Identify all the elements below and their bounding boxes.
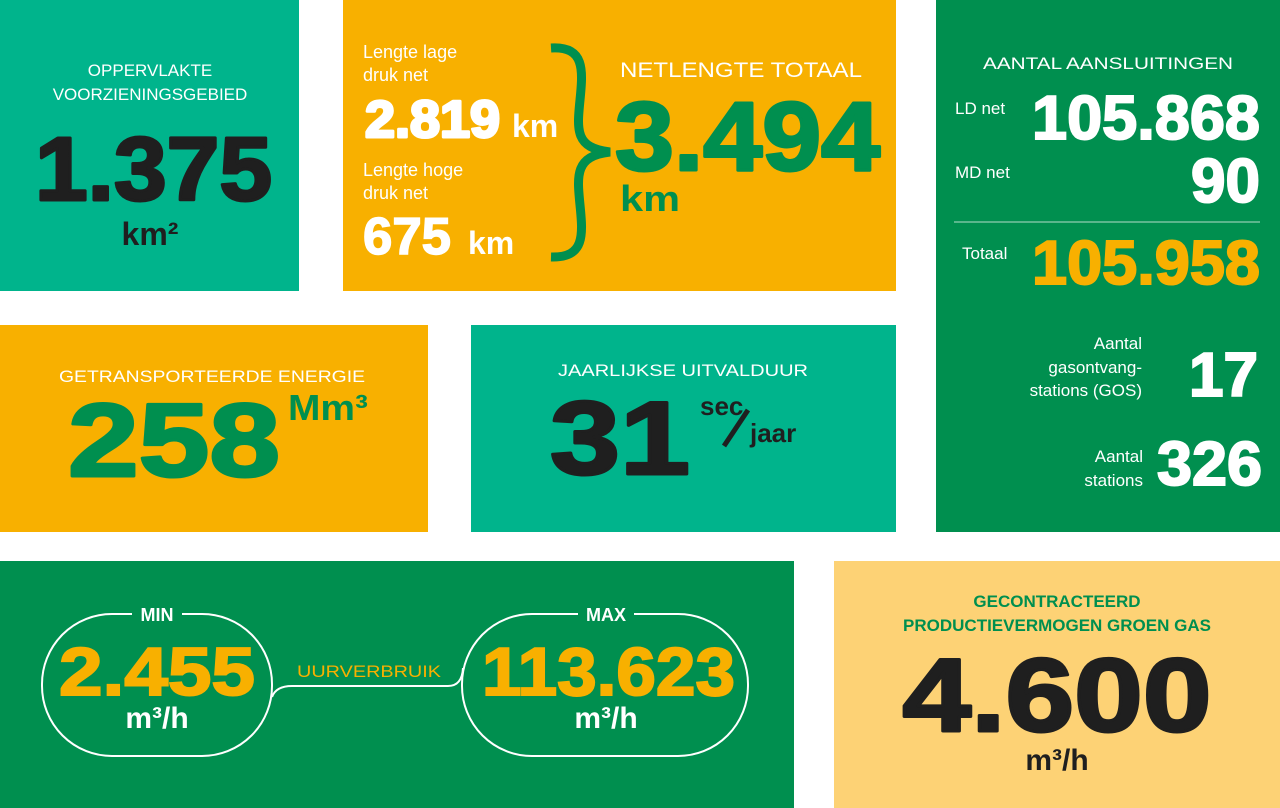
number: 31 sec/jaar: sec — [700, 391, 743, 421]
number: 258 Mm3: Mm³ — [288, 387, 368, 428]
panel: uurverbruik — [0, 561, 794, 808]
heading: oppervlakte: VOORZIENINGSGEBIED — [53, 85, 247, 104]
row: GOS: gasontvang- — [1048, 358, 1142, 377]
heading: netlengte totaal: NETLENGTE TOTAAL — [620, 59, 862, 82]
text: lengte lage druk net: druk net — [363, 65, 428, 85]
row: GOS — [1030, 334, 1258, 410]
heading: jaarlijkse uitvalduur: JAARLIJKSE UITVALDUUR — [558, 361, 808, 380]
number: 31 sec/jaar: jaar — [749, 418, 796, 448]
label: uurverbruik: UURVERBRUIK — [297, 662, 442, 681]
panel: uitvalduur — [471, 325, 896, 532]
pill: min — [42, 604, 272, 756]
text: lengte lage druk net: Lengte lage — [363, 42, 457, 62]
row: MD net: MD net — [955, 163, 1010, 182]
heading: getransporteerde energie: GETRANSPORTEERDE ENERGIE — [59, 367, 365, 386]
row: LD net: 105.868 — [1032, 84, 1260, 153]
heading: aantal aansluitingen: AANTAL AANSLUITINGEN — [983, 54, 1233, 73]
number: 2.819 km: km — [512, 108, 558, 144]
row: totaal: Totaal — [962, 244, 1007, 263]
row: stations — [1084, 430, 1262, 499]
heading: gecontracteerd productievermogen: PRODUCTIEVERMOGEN GROEN GAS — [903, 616, 1211, 635]
pill: max — [462, 604, 748, 756]
pill: min: MIN — [140, 605, 174, 625]
unit: km2: km² — [122, 216, 178, 252]
row: GOS: Aantal — [1094, 334, 1142, 353]
number: 4.600: 4.600 — [902, 638, 1212, 754]
heading: gecontracteerd productievermogen: GECONTRACTEERD — [973, 592, 1141, 611]
panel: netlengte — [343, 0, 896, 291]
panel: energie — [0, 325, 428, 532]
number: 675 km: 675 — [363, 208, 451, 266]
pill: max: 113.623 — [482, 634, 735, 710]
number: 2.819 km: 2.819 — [365, 91, 500, 149]
heading: oppervlakte: OPPERVLAKTE — [88, 61, 212, 80]
number: 675 km: km — [468, 225, 514, 261]
text: lengte hoge druk net: Lengte hoge — [363, 160, 463, 180]
number: 3.494 km: km — [620, 178, 680, 219]
connector line — [272, 668, 463, 697]
row: stations: stations — [1084, 471, 1143, 490]
pill: min: 2.455 — [59, 634, 255, 710]
number: 31 sec/jaar — [550, 381, 796, 497]
number: 258 Mm3 — [68, 383, 368, 499]
pill: min: m³/h — [125, 702, 189, 735]
number: 31 sec/jaar: 31 — [550, 381, 690, 497]
text: lengte hoge druk net: druk net — [363, 183, 428, 203]
row: GOS: stations (GOS) — [1030, 381, 1142, 400]
row: GOS: 17 — [1189, 341, 1258, 410]
icon: brace — [551, 48, 610, 257]
number: 258 Mm3: 258 — [68, 383, 280, 499]
panel: oppervlakte — [0, 0, 299, 291]
unit: m3/h: m³/h — [1025, 744, 1089, 777]
pill: max: m³/h — [574, 702, 638, 735]
row: stations: 326 — [1157, 430, 1262, 499]
panel: groen gas — [834, 561, 1280, 808]
row: LD net: LD net — [955, 99, 1005, 118]
number: 3.494 km: 3.494 — [615, 82, 880, 191]
row: MD net — [955, 147, 1260, 216]
number: 2.819 km — [365, 91, 558, 149]
row: totaal: 105.958 — [1032, 229, 1260, 298]
row: stations: Aantal — [1095, 447, 1143, 466]
number: 675 km — [363, 208, 514, 266]
panel: aansluitingen — [936, 0, 1280, 532]
pill: max: MAX — [586, 605, 626, 625]
number: 1.375: 1.375 — [35, 120, 272, 220]
row: MD net: 90 — [1191, 147, 1260, 216]
